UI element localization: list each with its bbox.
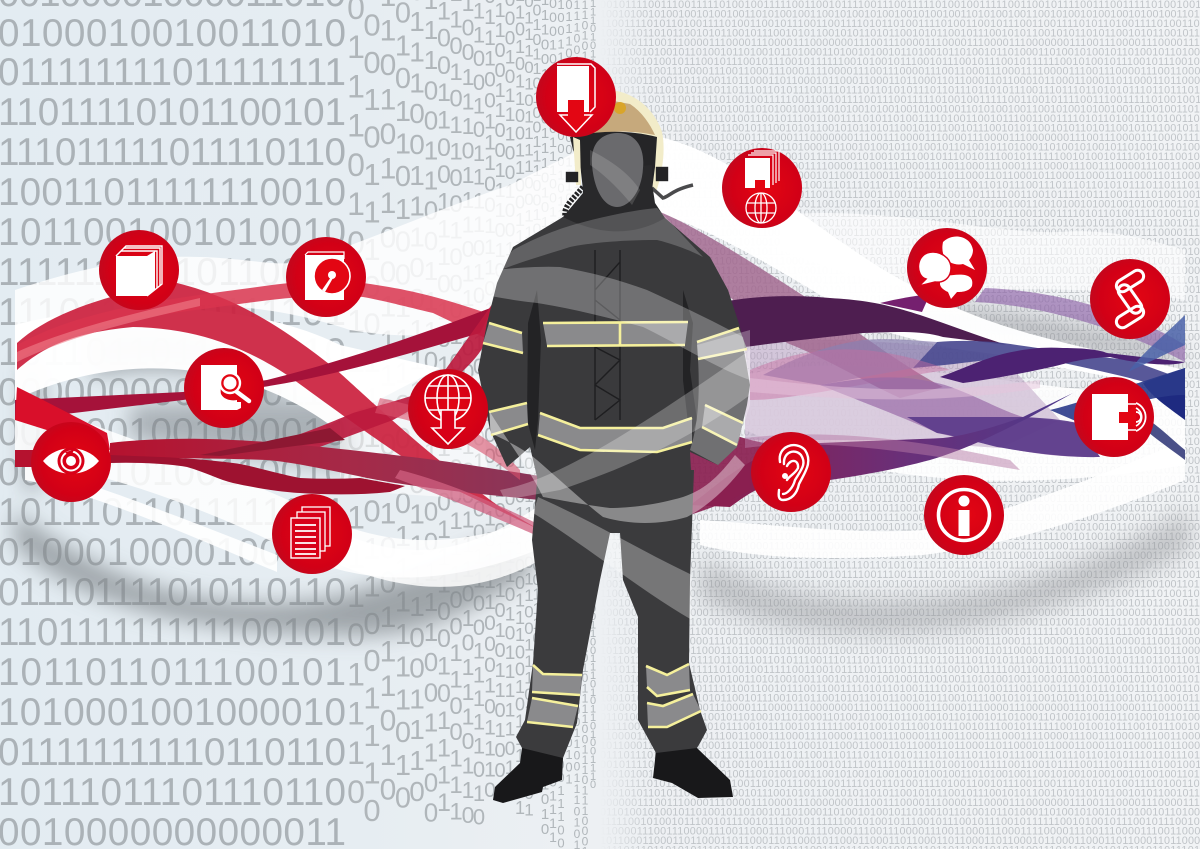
warped binary digit columns, centre: 110101100111001100111010: [372, 0, 404, 808]
warped binary digit columns, centre: 110101100110011100111110101110111001110010111111: [510, 0, 530, 815]
icon: book download: [536, 57, 616, 137]
icon: search document: [184, 348, 264, 428]
large binary digits, left: [0, 0, 346, 849]
large binary digits, left: 011101111010110110: [0, 571, 346, 614]
icon: globe download: [408, 369, 488, 449]
icon: disc on book: [286, 237, 366, 317]
jacket creases and zip: [527, 250, 697, 450]
icon: chain link: [1090, 259, 1170, 339]
large binary digits, left: 0100010000100010: [0, 531, 346, 574]
warped binary digit columns, centre: 011100111001110101111001110111000101110: [478, 0, 502, 800]
large binary digits, left: 1011011011100101: [0, 651, 346, 694]
firefighter: [478, 90, 750, 803]
headset and radio cord: [565, 168, 693, 232]
translucent white ribbons crossing the firefighter: [478, 150, 750, 620]
icon: audio book: [1074, 377, 1154, 457]
warped binary digit columns, centre: 01110101111001110111000101110011100110011101011001: [520, 0, 538, 817]
warped binary digit columns, centre: 10101101001110010111111010111001110011100111001100111: [528, 0, 546, 762]
jacket: [478, 217, 750, 490]
trousers: [516, 470, 707, 758]
large binary digits, left: 11101111110111101: [0, 291, 346, 334]
icon: document stack: [99, 230, 179, 310]
face: [592, 133, 643, 207]
warped binary digit columns, centre: 11010110010001011100111001100111: [442, 0, 470, 825]
large binary digits, left: 10011011111110010: [0, 171, 346, 214]
icon: page sheets: [272, 494, 352, 574]
large binary digits, left: 11011110101100101: [0, 91, 346, 134]
boots: [493, 748, 733, 803]
large binary digits, left: 0000001001000010: [0, 411, 346, 454]
tiny binary field, right: [600, 0, 1200, 849]
large binary digits, left: 10111011011111101: [0, 491, 346, 534]
warped binary digit columns, centre: 11100110011101011001110011001110101101001: [489, 0, 511, 800]
warped binary digit columns, centre: 000101110010011101111110010111101011111010: [500, 0, 520, 796]
warped binary digit columns, centre: 1110011001110101100111001100: [416, 0, 446, 828]
fade into the tiny field: [600, 0, 650, 849]
helmet: [570, 90, 664, 192]
warped binary digit columns, centre: 111001100111010110011100110011101011010011100101110111010: [536, 0, 554, 836]
large binary digits, left: 011111111011111111: [0, 51, 346, 94]
icon: ear: [751, 432, 831, 512]
large binary digits, left: 1011001001010010: [0, 211, 346, 254]
large binary digits, left: 10111011101110110: [0, 771, 346, 814]
shadow under ribbons: [15, 300, 1190, 636]
trouser reflective stripes: [527, 664, 701, 727]
large binary digits, left: 111011111011110110: [0, 131, 346, 174]
warped binary digit columns, centre: 111001011110101101001100110011111010: [466, 0, 492, 828]
warped binary digit columns, centre: 1110101110011100111001110101111001110111000101110011100110011101011001110011001110101101001110: [587, 0, 599, 788]
warped binary digit columns, centre: 10011101110001011100111001100111010110011100110011101011010011100: [554, 0, 568, 849]
warped binary digit columns, centre: 01110101111001110111000101110011100110011101011001110011001110101: [562, 0, 576, 784]
large binary digits, left: 1010001001000010: [0, 691, 346, 734]
purple and blue data ribbons, right: [660, 212, 1185, 515]
icon: information: [924, 475, 1004, 555]
warped binary digit columns, centre: [338, 0, 599, 849]
red data ribbons, left: [15, 281, 540, 537]
jacket reflective stripes: [483, 322, 747, 452]
large binary digits, left: 11111111010110001: [0, 251, 346, 294]
hood and neck: [563, 165, 665, 231]
warped binary digit columns, centre: 1101011001110011001110101101001110010111111010111001110011100111010111100111011100010: [578, 0, 592, 849]
white ribbons, back layer: [15, 135, 1185, 587]
icon: speech bubbles: [907, 228, 987, 308]
large binary digits, left: 1011011011011010: [0, 331, 346, 374]
warped binary digit columns, centre: 1001110111011100111001110101110110: [455, 0, 481, 826]
large binary digits, left: 0010010100110010: [0, 451, 346, 494]
large binary digits, left: 110111111111100101: [0, 611, 346, 654]
icon: eye: [31, 422, 111, 502]
large binary digits, left: 011111111110110110: [0, 731, 346, 774]
warped binary digit columns, centre: 0001011100111001100111010110011100110011101011010011100101111: [545, 0, 561, 843]
warped binary digit columns, centre: 011101011110011101110: [338, 0, 374, 813]
large binary digits, left: 0100010010011010: [0, 12, 346, 55]
large binary digits, left: 0000000000010110: [0, 371, 346, 414]
warped binary digit columns, centre: 11100101111110101110011100111001110101111001110111000101110011100110011101011: [570, 0, 584, 849]
icon: book to web: [722, 148, 802, 228]
